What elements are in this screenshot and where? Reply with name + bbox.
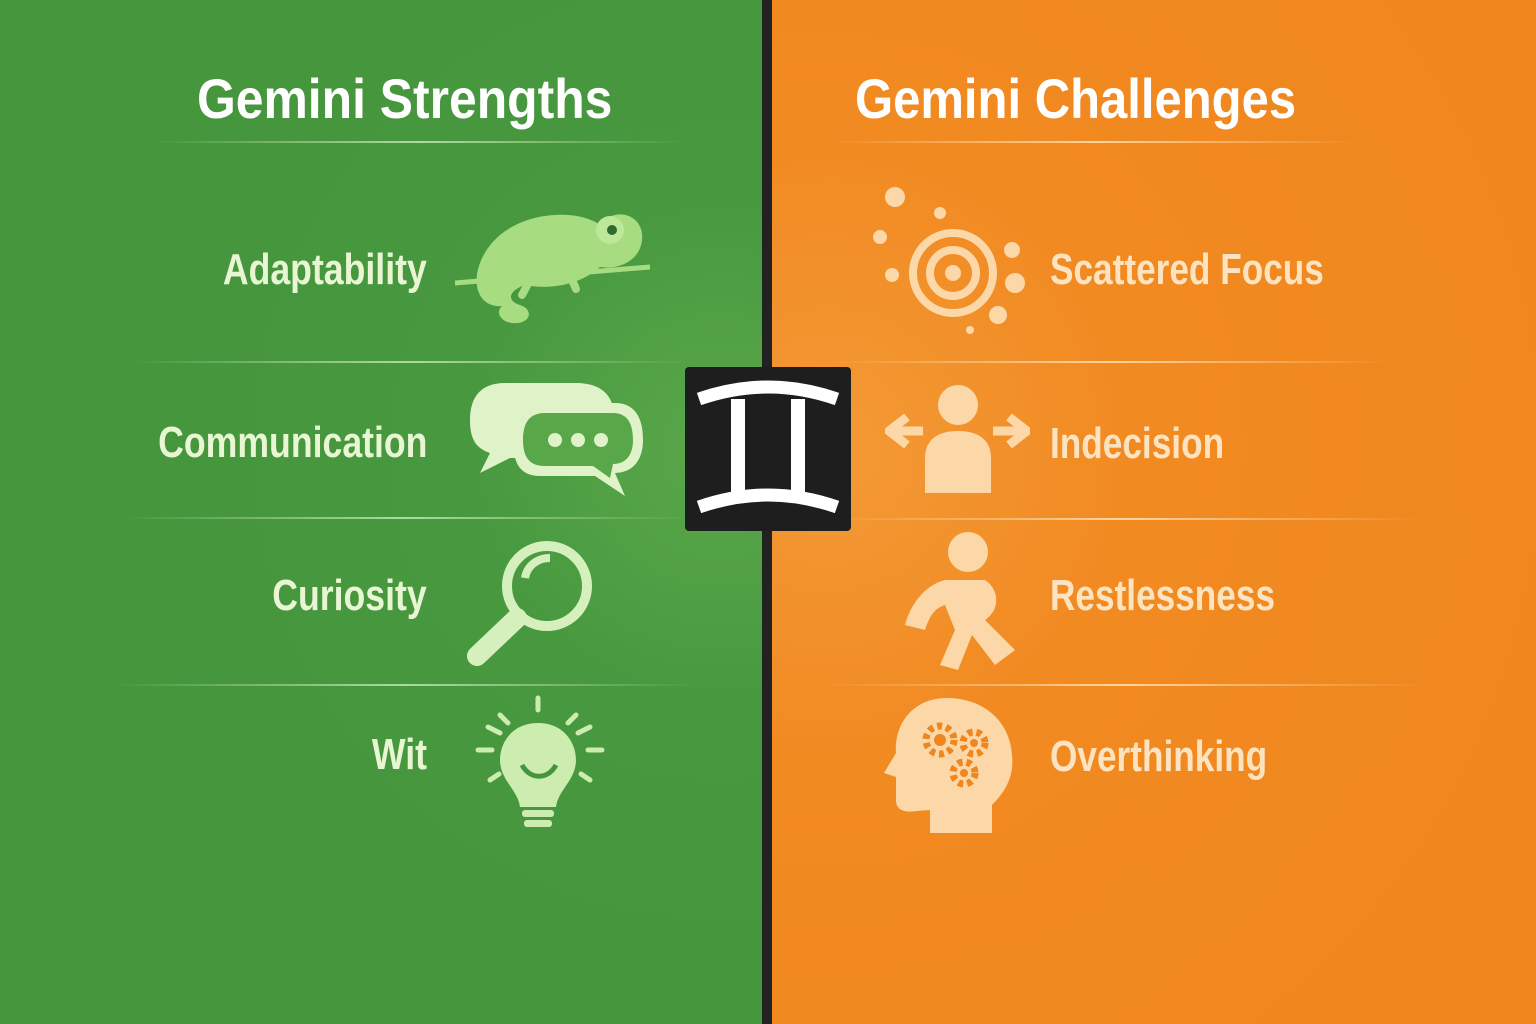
title: Gemini Challenges: Gemini Challenges bbox=[855, 67, 1296, 130]
gemini symbol badge bbox=[685, 367, 851, 531]
icon: speech bubbles bbox=[470, 383, 643, 496]
icon: head with gears bbox=[884, 698, 1012, 833]
label: Restlessness: Restlessness bbox=[1050, 571, 1275, 620]
icon: chameleon bbox=[454, 214, 650, 324]
icon: restless person bbox=[905, 532, 1015, 670]
label: Adaptability: Adaptability bbox=[223, 245, 427, 294]
icon: lightbulb bbox=[476, 696, 604, 827]
icon: person with arrows bbox=[885, 385, 1030, 493]
icon: scattered target bbox=[873, 187, 1025, 334]
label: Scattered Focus: Scattered Focus bbox=[1050, 245, 1324, 294]
label: Wit: Wit bbox=[372, 730, 427, 779]
label: Overthinking: Overthinking bbox=[1050, 732, 1267, 781]
label: Curiosity: Curiosity bbox=[273, 571, 427, 620]
label: Communication: Communication bbox=[158, 418, 427, 467]
icon: magnifying glass bbox=[467, 541, 592, 666]
label: Indecision: Indecision bbox=[1050, 419, 1224, 468]
title: Gemini Strengths: Gemini Strengths bbox=[197, 67, 612, 130]
